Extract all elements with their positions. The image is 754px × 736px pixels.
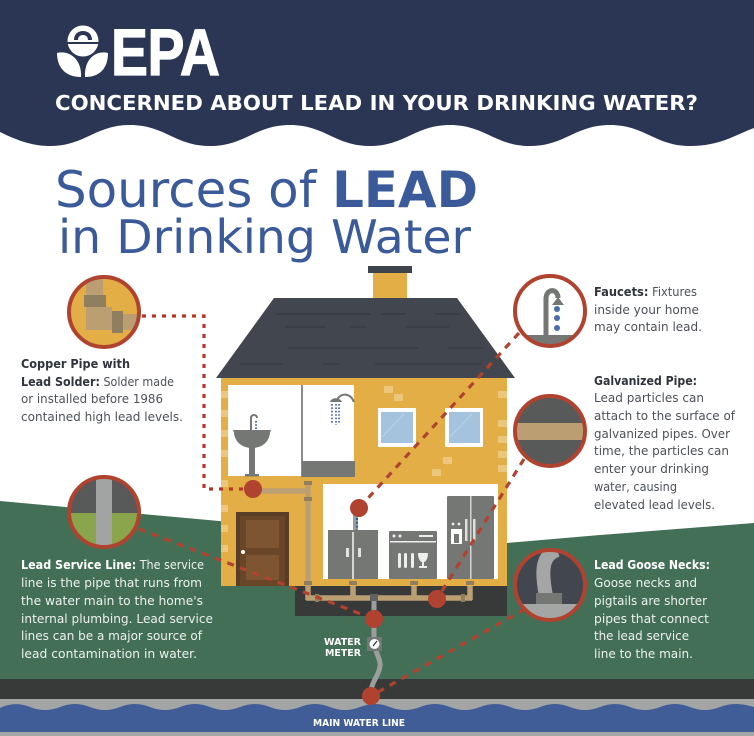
kitchen xyxy=(323,484,498,579)
icon: galvanized pipe xyxy=(515,396,585,466)
bathroom xyxy=(228,385,355,477)
house xyxy=(216,266,515,616)
text: galvanized pipe: elevated lead levels. xyxy=(594,498,715,512)
wall xyxy=(221,378,507,586)
icon: fridge xyxy=(447,496,494,579)
main water line xyxy=(0,699,754,736)
text: copper pipe: Lead Solder: Solder made xyxy=(21,375,174,389)
text: faucets: may contain lead. xyxy=(594,320,702,334)
text: copper pipe: or installed before 1986 xyxy=(21,392,163,406)
brick accents xyxy=(221,386,507,552)
main water line: MAIN WATER LINE xyxy=(313,718,405,729)
icon: dishwasher xyxy=(389,531,437,579)
lead point markers xyxy=(244,480,446,705)
title xyxy=(55,161,478,264)
door xyxy=(236,512,289,586)
text: galvanized pipe: enter your drinking xyxy=(594,462,709,476)
text: faucets xyxy=(594,285,702,334)
text: goose necks: Lead Goose Necks: xyxy=(594,558,710,572)
text: galvanized pipe: attach to the surface of xyxy=(594,409,736,423)
title: Sources of LEAD xyxy=(55,161,478,219)
text: lead service line: line is the pipe that runs from xyxy=(21,576,202,590)
EPA logo: EPA xyxy=(111,15,219,89)
text: lead service line xyxy=(21,558,213,661)
icon: goose neck xyxy=(515,550,585,622)
green ground xyxy=(0,501,754,680)
text: goose necks: pipes that connect xyxy=(594,612,709,626)
text: copper pipe xyxy=(21,357,183,424)
text: galvanized pipe: time, the particles can xyxy=(594,444,729,458)
text: copper pipe: Copper Pipe with xyxy=(21,357,130,371)
header banner xyxy=(0,0,754,146)
text: faucets: inside your home xyxy=(594,303,699,317)
service line and water meter xyxy=(367,594,382,692)
roof xyxy=(216,298,515,378)
icon: copper pipe with solder xyxy=(69,275,140,347)
text: lead service line: internal plumbing. Lead service xyxy=(21,612,213,626)
text: galvanized pipe: Lead particles can xyxy=(594,391,704,405)
text: goose necks: line to the main. xyxy=(594,647,693,661)
soil band xyxy=(0,679,754,699)
chimney xyxy=(368,266,412,299)
banner headline: CONCERNED ABOUT LEAD IN YOUR DRINKING WATER? xyxy=(55,91,698,115)
EPA logo xyxy=(57,15,219,89)
text: lead service line: lead contamination in water. xyxy=(21,647,197,661)
text: lead service line: Lead Service Line: The service xyxy=(21,558,204,572)
text: galvanized pipe: galvanized pipes. Over xyxy=(594,427,730,441)
water meter label: WATER xyxy=(324,637,362,648)
icon: lead service line xyxy=(69,477,139,548)
icon: sink xyxy=(233,415,271,476)
text: goose necks: the lead service xyxy=(594,629,689,643)
water meter label xyxy=(324,637,362,659)
title: in Drinking Water xyxy=(58,210,471,264)
foundation xyxy=(295,586,507,616)
callout lines xyxy=(139,316,525,696)
text: galvanized pipe xyxy=(594,374,736,512)
text: lead service line: lines can be a major source of xyxy=(21,629,203,643)
icon: cabinet xyxy=(328,515,378,579)
text: copper pipe: contained high lead levels. xyxy=(21,410,183,424)
water meter label: METER xyxy=(325,648,362,659)
text: lead service line: the water main to the home's xyxy=(21,594,203,608)
text: goose necks xyxy=(594,558,710,661)
plumbing pipes xyxy=(253,481,474,602)
windows xyxy=(378,408,483,447)
icon: shower xyxy=(330,395,354,425)
icon: faucet xyxy=(515,276,585,347)
text: goose necks: pigtails are shorter xyxy=(594,594,707,608)
text: goose necks: Goose necks and xyxy=(594,576,697,590)
text: galvanized pipe: Galvanized Pipe: xyxy=(594,374,697,388)
text: galvanized pipe: water, causing xyxy=(594,480,677,494)
text: faucets: Faucets: Fixtures xyxy=(594,285,697,299)
